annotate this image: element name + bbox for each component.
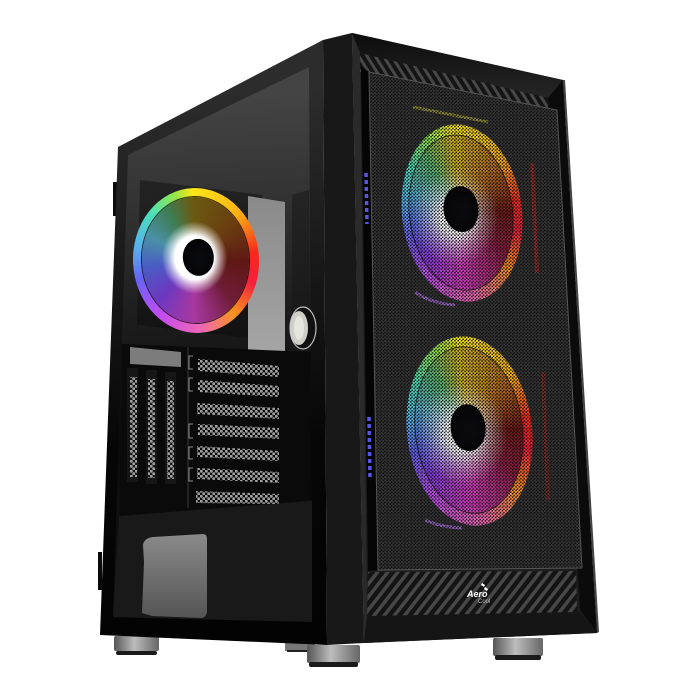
motherboard plate [248, 196, 285, 358]
foot: front left [307, 645, 360, 667]
side LED glow [366, 173, 370, 480]
fan: side RGB fan [129, 185, 263, 336]
fan: front lower RGB fan [396, 329, 543, 533]
side panel latch [290, 307, 316, 349]
side glass window [113, 67, 312, 622]
foot: rear middle [285, 642, 315, 652]
vertical slots [127, 368, 176, 484]
corner pillar [323, 33, 364, 645]
fan blades [401, 129, 521, 295]
top vent [360, 53, 548, 108]
slot brackets [188, 347, 193, 508]
power supply shroud [113, 501, 312, 622]
side panel frame [100, 40, 327, 645]
brand logo [466, 583, 490, 605]
foot: front right [493, 638, 543, 660]
brand logo: Aero [466, 589, 488, 599]
fan hub [441, 184, 481, 234]
white centre glow [396, 329, 543, 533]
front frame left edge [352, 33, 367, 643]
expansion area backing [120, 344, 311, 516]
fan hub [448, 402, 488, 453]
shroud window sticker [142, 534, 207, 618]
front frame top bevel [352, 33, 563, 98]
side hinge tabs [98, 182, 117, 590]
foot: rear left [114, 636, 159, 655]
front frame right bevel [548, 80, 597, 633]
fan blades [406, 342, 532, 519]
mesh panel backing [369, 72, 582, 570]
internal vertical rail [292, 190, 310, 480]
white centre glow [129, 185, 263, 336]
brand logo: Cool [478, 599, 490, 605]
rear fan mounting frame [137, 180, 266, 340]
front frame bottom bevel [364, 611, 597, 643]
top bracket [130, 347, 181, 367]
fan: front upper RGB fan [392, 117, 532, 309]
fan light smears [413, 107, 548, 528]
front frame right highlight [563, 80, 599, 633]
front frame [352, 33, 597, 643]
fan blades [139, 194, 252, 326]
bottom vent [367, 571, 577, 616]
mesh panel [369, 72, 582, 570]
horizontal slot covers [196, 359, 279, 504]
fan hub [182, 238, 215, 277]
white centre glow [392, 117, 532, 309]
side LED strip recess [361, 66, 378, 571]
